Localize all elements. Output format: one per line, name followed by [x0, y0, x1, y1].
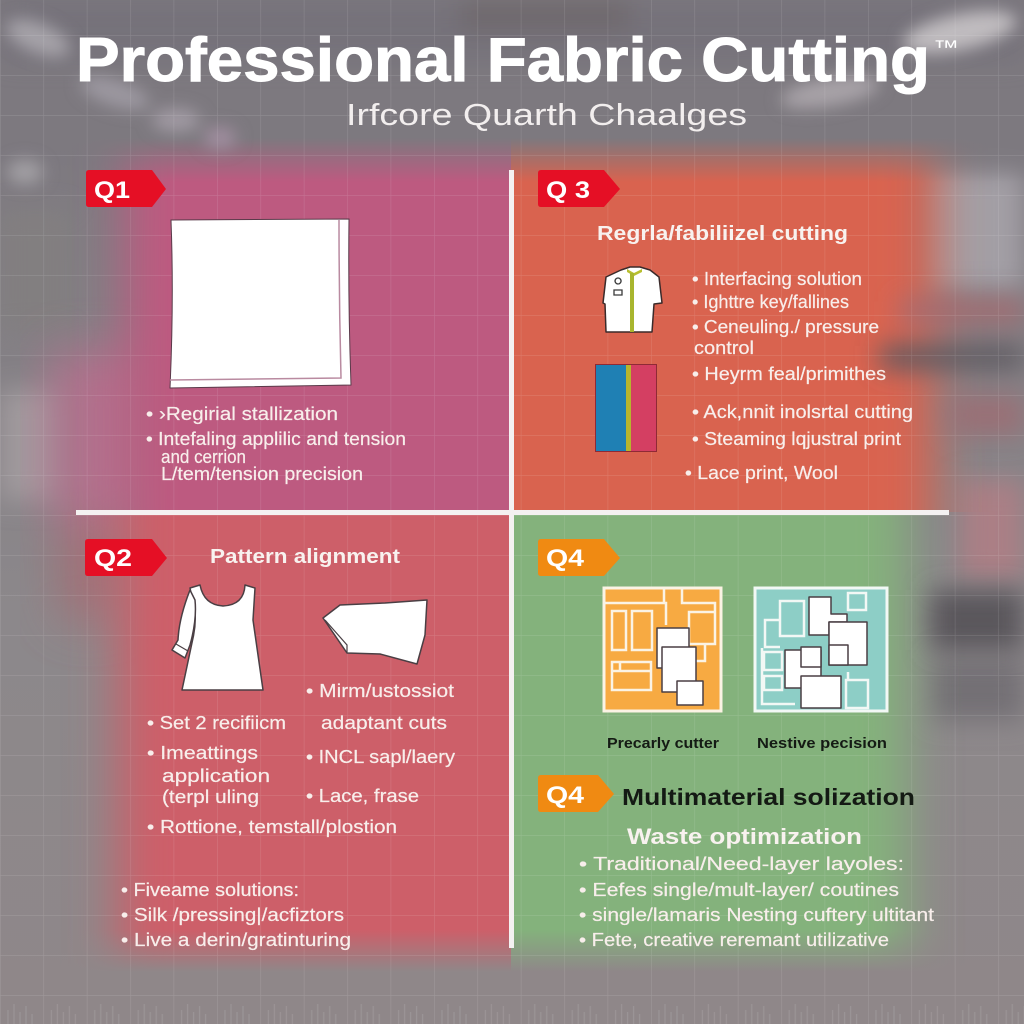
Q3 bullet list: • Lace print, Wool — [685, 463, 838, 483]
Q2 bullet list: right: • Lace, frase — [306, 786, 419, 806]
Q2 solutions list — [121, 880, 351, 950]
panel: Q3 — [538, 170, 913, 483]
Q3 heading: Regrla/fabiliizel cutting — [597, 223, 848, 245]
tag: Q4: Q4 — [546, 545, 585, 572]
tag: Q1 — [86, 170, 166, 207]
Q1 bullet list: and cerrion — [161, 447, 246, 467]
Q2 bullet list: right: • Mirm/ustossiot — [306, 681, 454, 701]
Q1 bullet list — [146, 404, 406, 484]
Q2 bullet list: right: • INCL sapl/laery — [306, 747, 455, 767]
panel: Q2 — [85, 539, 455, 950]
Q2 bullet list: left: • Rottione, temstall/plostion — [147, 817, 397, 837]
Q2 bullet list: left: application — [162, 766, 270, 786]
Q4 bullet list — [579, 854, 934, 950]
icon: fabric square — [170, 219, 351, 388]
panel: Q1 — [86, 170, 406, 484]
Q3 bullet list: • Ceneuling./ pressure — [692, 317, 879, 337]
nesting chart captions — [607, 735, 887, 752]
Q4 bullet list: • Eefes single/mult-layer/ coutines — [579, 880, 899, 900]
tag: second Q4: Q4 — [546, 782, 585, 809]
nesting chart captions: Nestive pecision — [757, 735, 887, 752]
Q2 bullet list: right: adaptant cuts — [321, 713, 447, 733]
Q3 bullet list: control — [694, 338, 754, 358]
Q2 bullet list: left — [147, 713, 397, 837]
subtitle: Irfcore Quarth Chaalges — [346, 97, 747, 132]
Q1 bullet list: • ›Regirial stallization — [146, 404, 338, 424]
chart: teal nesting layout — [755, 588, 887, 711]
title: Professional Fabric Cutting — [76, 26, 930, 95]
tag: Q2: Q2 — [94, 545, 132, 572]
Q3 bullet list: • Interfacing solution — [692, 269, 862, 289]
tag: Q4 — [538, 539, 620, 576]
Q2 solutions list: • Live a derin/gratinturing — [121, 930, 351, 950]
Q4 bullet list: • Traditional/Need-layer layoles: — [579, 854, 904, 874]
Q1 bullet list: • Intefaling applilic and tension — [146, 429, 406, 449]
Q2 solutions list: • Fiveame solutions: — [121, 880, 299, 900]
Q2 bullet list: left: • Set 2 recifiicm — [147, 713, 286, 733]
icon: shirt — [603, 267, 662, 332]
tag: second Q4 — [538, 775, 614, 812]
tag: Q3: Q 3 — [546, 177, 590, 204]
Q3 bullet list: • Steaming lqjustral print — [692, 429, 901, 449]
icon: two-colour fabric with zipper — [595, 364, 657, 452]
icon: sleeveless garment — [172, 585, 263, 690]
Q1 bullet list: L/tem/tension precision — [161, 464, 363, 484]
Q4 bullet list: • single/lamaris Nesting cuftery ultitant — [579, 905, 934, 925]
Q2 bullet list: left: (terpl uling — [162, 787, 259, 807]
Q3 bullet list: • Heyrm feal/primithes — [692, 364, 886, 384]
panel: Q4 — [538, 539, 934, 950]
nesting chart captions: Precarly cutter — [607, 735, 719, 752]
tag: Q1: Q1 — [94, 177, 130, 204]
Q3 bullet list — [685, 269, 913, 483]
Q2 bullet list: left: • Imeattings — [147, 743, 258, 763]
trademark sign: ™ — [933, 37, 959, 59]
Q3 bullet list: • Ack,nnit inolsrtal cutting — [692, 402, 913, 422]
Q4 subheading: Waste optimization — [627, 824, 862, 849]
Q2 heading: Pattern alignment — [210, 546, 400, 568]
Q3 bullet list: • Ighttre key/fallines — [692, 292, 849, 312]
tag: Q3 — [538, 170, 620, 207]
tag: Q2 — [85, 539, 167, 576]
chart: orange nesting layout — [604, 588, 721, 711]
Q4 heading: Multimaterial solization — [622, 784, 915, 810]
Q2 bullet list: right — [306, 681, 455, 806]
Q2 solutions list: • Silk /pressing|/acfiztors — [121, 905, 344, 925]
Q4 bullet list: • Fete, creative reremant utilizative — [579, 930, 889, 950]
quadrant dividers — [76, 170, 949, 948]
icon: fabric sleeve — [323, 600, 427, 664]
